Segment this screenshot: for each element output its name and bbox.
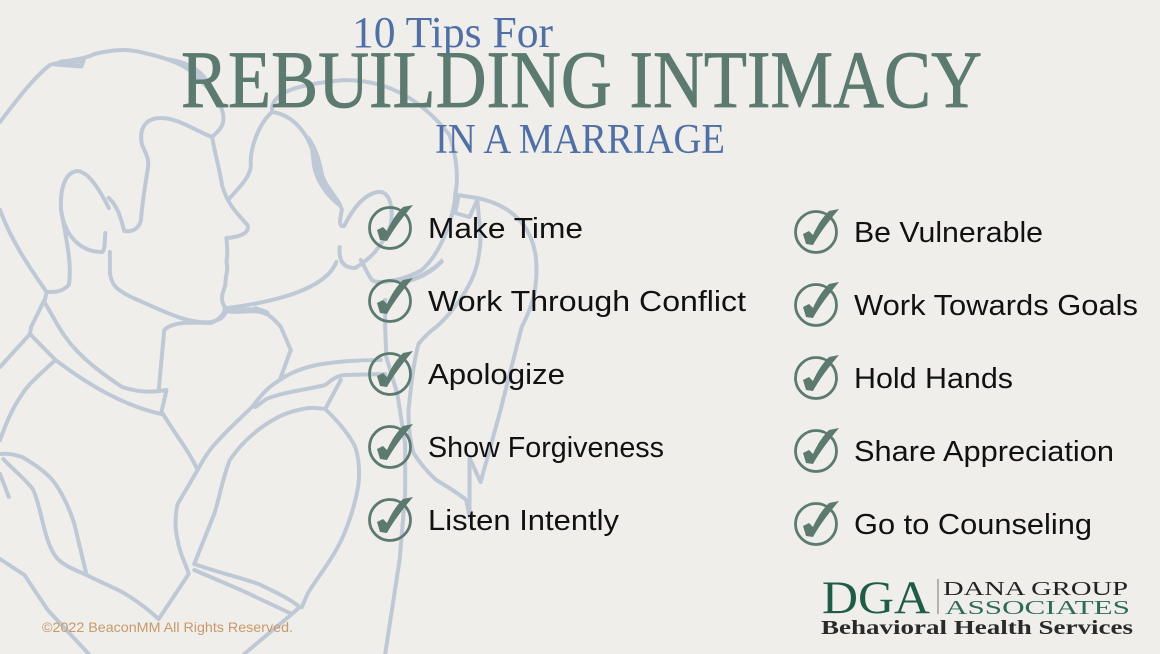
tip: Show Forgiveness: Show Forgiveness: [428, 432, 664, 464]
icon: check: [370, 205, 413, 248]
logo: Dana Group Associates: ASSOCIATES: [945, 597, 1130, 619]
illustration: embracing couple line art: [0, 50, 537, 654]
icon: check: [796, 282, 839, 326]
logo: Dana Group Associates: [821, 572, 1133, 639]
tip: Share Appreciation: Share Appreciation: [854, 436, 1114, 468]
copyright: ©2022 BeaconMM All Rights Reserved.: [42, 619, 293, 635]
icon: check: [796, 209, 839, 252]
icon: check: [370, 351, 413, 394]
tip: Make Time: Make Time: [428, 213, 583, 245]
tip: Work Through Conflict: Work Through Conflict: [428, 286, 746, 318]
tip: Work Towards Goals: Work Towards Goals: [854, 290, 1138, 322]
heading: In a Marriage: IN A MARRIAGE: [435, 117, 725, 163]
tip: Apologize: Apologize: [428, 359, 565, 391]
logo: Dana Group Associates: DANA GROUP: [943, 578, 1128, 600]
icon: check: [370, 278, 413, 322]
tip: Hold Hands: Hold Hands: [854, 363, 1013, 395]
right checklist: [796, 209, 1138, 544]
logo: Dana Group Associates: Behavioral Health Services: [821, 617, 1133, 639]
title: Rebuilding Intimacy: REBUILDING INTIMACY: [181, 34, 982, 125]
icon: check: [796, 428, 839, 472]
icon: check: [796, 355, 839, 398]
icon: check: [370, 424, 413, 468]
tip: Go to Counseling: Go to Counseling: [854, 509, 1092, 541]
icon: check: [796, 501, 839, 544]
left checklist: [370, 205, 746, 540]
heading: 10 Tips For: 10 Tips For: [352, 8, 553, 57]
tip: Be Vulnerable: Be Vulnerable: [854, 217, 1043, 249]
tip: Listen Intently: Listen Intently: [428, 505, 620, 537]
icon: check: [370, 497, 413, 540]
logo: Dana Group Associates: DGA: [822, 572, 930, 624]
